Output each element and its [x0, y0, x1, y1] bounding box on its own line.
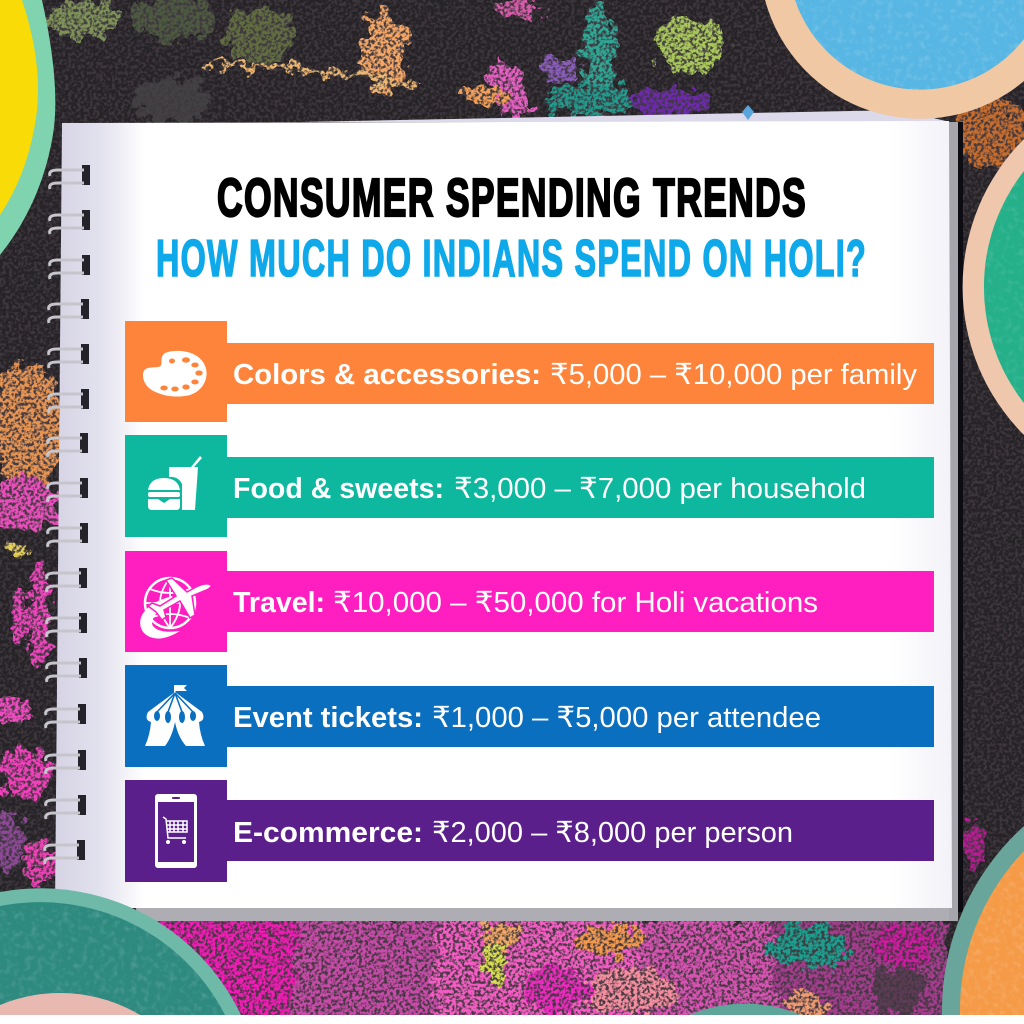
icon: globe and airplane: [140, 578, 211, 639]
label: food and sweets: ₹3,000 – ₹7,000 per household: [454, 473, 866, 505]
bowl: blue powder, top right: [765, 0, 1024, 119]
label: event tickets: [233, 702, 821, 734]
label: event tickets: ₹1,000 – ₹5,000 per attendee: [432, 702, 821, 734]
row: colors and accessories: [125, 321, 934, 422]
icon: paint palette: [143, 351, 207, 397]
label: e-commerce: ₹2,000 – ₹8,000 per person: [432, 817, 793, 849]
row: event tickets: [125, 665, 934, 767]
row: travel: [125, 551, 934, 652]
label: food and sweets: [233, 473, 866, 505]
label: colors and accessories: ₹5,000 – ₹10,000 per family: [550, 359, 918, 391]
bowl: orange powder, bottom right: [942, 826, 1024, 1015]
row: food and sweets: [125, 435, 934, 537]
label: e-commerce: [233, 817, 793, 849]
label: food and sweets: Food & sweets:: [233, 473, 444, 505]
label: e-commerce: E-commerce:: [233, 817, 423, 849]
bowl rim: small teal bowl, bottom centre: [689, 1004, 801, 1015]
bowl: yellow powder, top left: [0, 0, 55, 255]
blue powder speck: [742, 105, 754, 120]
bowl: teal powder, right edge: [963, 139, 1024, 435]
icon: phone with shopping cart: [155, 794, 197, 868]
white bottom strip: [0, 1015, 1024, 1024]
label: colors and accessories: [233, 359, 918, 391]
notebook: [45, 110, 963, 921]
label: travel: Travel:: [233, 587, 325, 619]
spiral binding: [45, 165, 90, 864]
row: e-commerce: [125, 780, 934, 882]
icon: burger and drink: [148, 456, 202, 510]
label: colors and accessories: Colors & accessories:: [233, 359, 541, 391]
icon: festival tent: [145, 685, 205, 746]
label: event tickets: Event tickets:: [233, 702, 423, 734]
bowl: green glazed bowl, bottom left: [0, 888, 241, 1015]
label: travel: ₹10,000 – ₹50,000 for Holi vacations: [333, 587, 818, 619]
